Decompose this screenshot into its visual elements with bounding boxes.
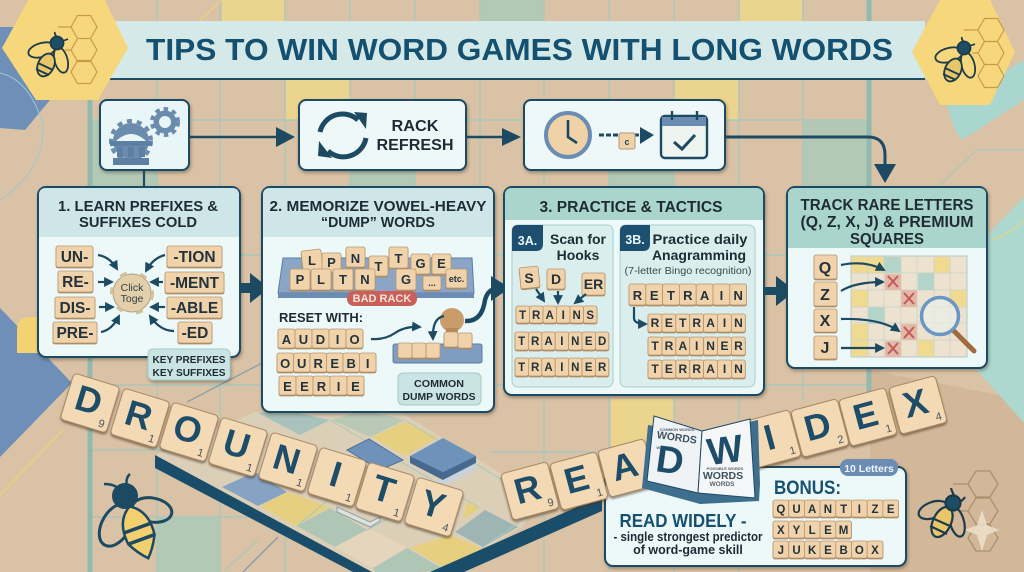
word tiles: audio, ourebi, eerie xyxy=(277,329,376,395)
hook tiles and arrows xyxy=(519,266,605,295)
word tiles: retrain, trainer, terrain: T xyxy=(651,339,659,353)
word tiles: READWIDEX: A xyxy=(607,443,642,489)
bonus word tiles xyxy=(773,500,899,558)
word tiles: audio, ourebi, eerie: O xyxy=(349,332,360,347)
icon: open book with words: WORDS xyxy=(703,470,743,482)
panel 4: track rare letters: (Q, Z, X, J) & PREMIUM xyxy=(800,214,974,231)
word tiles: trains, trained, trainer: E xyxy=(585,336,593,348)
word tiles: retrain xyxy=(629,284,747,305)
suffix tiles xyxy=(165,246,224,343)
word tiles: DROUNITY: N xyxy=(268,436,305,482)
word tiles: DROUNITY: 1 xyxy=(245,462,254,475)
panel 3: practice and tactics: 3. PRACTICE & TACTICS xyxy=(540,199,722,216)
bonus word tiles: E xyxy=(824,545,832,557)
word tiles: trains, trained, trainer: R xyxy=(531,362,540,374)
arrow to small rack xyxy=(371,327,420,339)
bonus word tiles: U xyxy=(792,545,801,557)
icon: open book with words: W xyxy=(704,428,746,474)
rare letter tiles: X xyxy=(820,313,831,330)
badge: 10 letters: 10 Letters xyxy=(844,463,894,475)
word tiles: READWIDEX: X xyxy=(899,380,932,426)
icon: open book with words: POSSIBLE WORDS xyxy=(707,466,744,471)
sub-panel 3B: practice daily anagramming: Anagramming xyxy=(652,247,746,263)
panel 4: track rare letters: TRACK RARE LETTERS xyxy=(800,197,974,214)
word tiles: retrain, trainer, terrain: A xyxy=(706,316,715,330)
read widely text: of word-game skill xyxy=(633,543,743,557)
word tiles: DROUNITY: U xyxy=(218,421,255,467)
word tiles: retrain, trainer, terrain: E xyxy=(720,339,729,353)
bonus word tiles: N xyxy=(824,504,832,516)
word tiles: audio, ourebi, eerie: E xyxy=(283,379,292,394)
bad rack with tiles: N xyxy=(351,251,360,266)
sub-panel 3A: scan for hooks: Hooks xyxy=(557,247,600,263)
bad rack label xyxy=(347,291,417,306)
prefix tiles: DIS- xyxy=(60,300,90,317)
word tiles: DROUNITY: 1 xyxy=(295,477,304,490)
icon: open book with words: WORDS xyxy=(710,481,735,488)
word tiles: audio, ourebi, eerie: E xyxy=(300,379,309,394)
word tiles: READWIDEX: 4 xyxy=(934,410,943,424)
bonus word tiles: M xyxy=(839,525,848,537)
word tiles: retrain, trainer, terrain: R xyxy=(692,316,701,330)
sub-panel 3B: practice daily anagramming: Practice daily xyxy=(652,231,748,247)
word tiles: READWIDEX: 2 xyxy=(836,433,845,447)
prefix tiles: UN- xyxy=(61,249,88,266)
word tiles: DROUNITY: T xyxy=(367,466,400,512)
word tiles: retrain: N xyxy=(734,288,743,303)
click-together gear piece: Toge xyxy=(121,293,144,305)
word tiles: DROUNITY: Y xyxy=(415,481,450,527)
word tiles: trains, trained, trainer: E xyxy=(585,362,593,374)
suffix tiles: -MENT xyxy=(170,275,220,292)
word tiles: DROUNITY: 4 xyxy=(441,522,450,535)
word tiles: retrain, trainer, terrain: N xyxy=(734,316,743,330)
rare letter tiles xyxy=(814,255,837,359)
bonus word tiles: L xyxy=(809,525,816,537)
word tiles: retrain: I xyxy=(720,288,723,303)
bad rack with tiles: L xyxy=(317,272,325,287)
bonus word tiles: K xyxy=(808,545,817,557)
mini premium-square board xyxy=(851,256,967,357)
word tiles: READWIDEX: 1 xyxy=(595,486,604,500)
bonus word tiles: O xyxy=(855,545,864,557)
word tiles: READWIDEX: E xyxy=(560,456,593,502)
word tiles: DROUNITY: 1 xyxy=(147,433,156,446)
bad rack with tiles: L xyxy=(308,253,316,268)
word tiles: DROUNITY: R xyxy=(120,392,157,438)
arrows from letters to squares xyxy=(841,263,899,348)
word tiles: READWIDEX: R xyxy=(510,466,545,512)
suffix tiles: -ABLE xyxy=(171,300,218,317)
panel 1: prefixes and suffixes: 1. LEARN PREFIXES & xyxy=(58,198,218,215)
bad rack with tiles: etc. xyxy=(449,274,464,284)
word tiles: trains, trained, trainer: I xyxy=(560,336,564,348)
panel 1: prefixes and suffixes: SUFFIXES COLD xyxy=(79,214,197,231)
word tiles: audio, ourebi, eerie: D xyxy=(316,332,325,347)
rare letter tiles: Z xyxy=(820,287,830,304)
bonus word tiles: Q xyxy=(776,504,785,516)
badge: 10 letters xyxy=(840,459,898,476)
panel 2: dump words: “DUMP” WORDS xyxy=(321,214,435,231)
bonus word tiles: X xyxy=(871,545,879,557)
word tiles: trains, trained, trainer: T xyxy=(518,336,525,348)
word tiles: READWIDEX: 9 xyxy=(546,496,555,510)
word tiles: DROUNITY: 1 xyxy=(392,507,401,520)
rare letter tiles: Q xyxy=(819,260,831,277)
word tiles: DROUNITY xyxy=(60,373,464,537)
word tiles: audio, ourebi, eerie: E xyxy=(330,356,339,371)
sub-panel 3A: scan for hooks xyxy=(512,225,613,387)
word tiles: retrain, trainer, terrain: E xyxy=(665,316,673,330)
word tiles: audio, ourebi, eerie: I xyxy=(337,379,340,394)
word tiles: retrain, trainer, terrain: I xyxy=(723,316,726,330)
game board in perspective xyxy=(155,410,602,572)
word tiles: retrain, trainer, terrain: R xyxy=(692,362,701,376)
word tiles: retrain, trainer, terrain xyxy=(648,314,745,378)
word tiles: trains, trained, trainer: I xyxy=(562,310,565,322)
bonus word tiles: B xyxy=(839,545,848,557)
icon: dashed arrow with tile: c xyxy=(624,137,630,147)
sub-panel 3A: scan for hooks: 3A. xyxy=(518,234,537,248)
arrows into click-together piece xyxy=(98,255,174,332)
panel 3: practice and tactics xyxy=(504,187,764,395)
word tiles: DROUNITY: 1 xyxy=(344,492,353,505)
word tiles: trains, trained, trainer: N xyxy=(573,310,581,322)
word tiles: retrain, trainer, terrain: R xyxy=(678,362,687,376)
word tiles: trains, trained, trainer xyxy=(515,306,609,376)
word tiles: DROUNITY: 1 xyxy=(196,447,205,460)
prefix tiles xyxy=(53,246,97,343)
word tiles: trains, trained, trainer: D xyxy=(598,336,606,348)
bad rack with tiles: G xyxy=(401,272,411,287)
icon: open book with words: WORDS xyxy=(656,429,698,447)
word tiles: audio, ourebi, eerie: A xyxy=(282,332,292,347)
panel 4: track rare letters xyxy=(787,187,987,368)
icon: open book with words: D xyxy=(653,438,686,484)
hook tiles and arrows: S xyxy=(524,270,534,286)
word tiles: audio, ourebi, eerie: U xyxy=(299,332,308,347)
arrow: panel 3 to panel 4 xyxy=(764,276,795,306)
arrow: panel 1 to panel 2 xyxy=(240,273,269,303)
icon: clock xyxy=(546,113,590,157)
legend: key prefixes and suffixes: KEY PREFIXES xyxy=(152,354,226,366)
bonus word tiles: X xyxy=(777,525,785,537)
title banner: TIPS TO WIN WORD GAMES WITH LONG WORDS xyxy=(146,32,893,67)
small rack with hand xyxy=(393,308,482,363)
bonus word tiles: A xyxy=(808,504,816,516)
icon: left honeycomb badge with bee xyxy=(2,0,128,100)
word tiles: retrain: R xyxy=(633,288,643,303)
word tiles: retrain, trainer, terrain: A xyxy=(678,339,687,353)
bonus word tiles: Y xyxy=(793,525,801,537)
step box: learn icon xyxy=(100,100,189,170)
word tiles: audio, ourebi, eerie: B xyxy=(347,356,356,371)
read widely text: - single strongest predictor xyxy=(614,530,763,544)
bad rack with tiles: P xyxy=(327,255,336,270)
click-together gear piece xyxy=(112,272,152,314)
word tiles: trains, trained, trainer: R xyxy=(532,310,541,322)
bonus word tiles: I xyxy=(858,504,861,516)
word tiles: retrain, trainer, terrain: T xyxy=(651,362,659,376)
word tiles: retrain, trainer, terrain: T xyxy=(679,316,687,330)
bad rack with tiles: G xyxy=(415,256,426,271)
word tiles: trains, trained, trainer: A xyxy=(544,336,553,348)
word tiles: trains, trained, trainer: N xyxy=(571,336,579,348)
common dump words label xyxy=(398,373,481,405)
word tiles: trains, trained, trainer: A xyxy=(546,310,554,322)
prefix tiles: PRE- xyxy=(56,325,94,342)
word tiles: DROUNITY: 9 xyxy=(97,418,106,431)
sub-panel 3B: practice daily anagramming: (7-letter Bingo recognition) xyxy=(624,265,752,277)
prefix tiles: RE- xyxy=(62,274,89,291)
sub-panel 3B: practice daily anagramming xyxy=(620,225,755,387)
panel 4: track rare letters: SQUARES xyxy=(850,231,924,248)
word tiles: retrain, trainer, terrain: N xyxy=(706,339,715,353)
icon: bee with honeycomb bottom right xyxy=(916,471,999,551)
step box: rack refresh: RACK xyxy=(392,118,439,135)
step box: rack refresh xyxy=(299,100,466,170)
icon: open book with words: WIDELY xyxy=(656,445,672,450)
word tiles: retrain, trainer, terrain: R xyxy=(665,339,674,353)
icon: magnifying glass xyxy=(922,298,974,351)
bad rack with tiles: T xyxy=(395,251,403,266)
word tiles: READWIDEX: 1 xyxy=(788,444,797,458)
icon: right honeycomb badge with bee xyxy=(912,0,1015,105)
legend: key prefixes and suffixes: KEY SUFFIXES xyxy=(152,367,226,379)
bonus word tiles: E xyxy=(887,504,895,516)
word tiles: audio, ourebi, eerie: E xyxy=(351,379,360,394)
word tiles: retrain: E xyxy=(650,288,659,303)
word tiles: READWIDEX xyxy=(501,376,947,520)
bonus word tiles: T xyxy=(840,504,847,516)
sub-panel 3B: practice daily anagramming: 3B. xyxy=(625,233,645,247)
bad rack with tiles: N xyxy=(360,272,370,287)
bad rack with tiles xyxy=(278,247,474,298)
word tiles: retrain, trainer, terrain: A xyxy=(706,362,715,376)
connector arrows between top step boxes xyxy=(144,127,896,187)
icon: open book with words xyxy=(642,416,760,504)
word tiles: audio, ourebi, eerie: O xyxy=(280,356,290,371)
panel: read widely and bonus xyxy=(605,459,906,566)
icon: gear and temple xyxy=(110,109,178,165)
common dump words label: DUMP WORDS xyxy=(402,391,476,403)
word tiles: audio, ourebi, eerie: U xyxy=(297,356,306,371)
bonus heading: BONUS: xyxy=(774,478,841,499)
word tiles: trains, trained, trainer: I xyxy=(560,362,564,374)
icon: dashed arrow with tile xyxy=(599,127,654,149)
word tiles: trains, trained, trainer: T xyxy=(519,310,526,322)
word tiles: audio, ourebi, eerie: I xyxy=(336,332,339,347)
word tiles: retrain, trainer, terrain: I xyxy=(723,362,726,376)
step box: daily schedule xyxy=(524,100,725,170)
word tiles: DROUNITY: O xyxy=(168,405,207,453)
icon: refresh arrows xyxy=(318,112,367,158)
sub-panel 3A: scan for hooks: Scan for xyxy=(550,231,607,247)
word tiles: retrain: A xyxy=(700,288,710,303)
word tiles: retrain, trainer, terrain: N xyxy=(734,362,743,376)
bad rack with tiles: E xyxy=(437,256,446,271)
word tiles: trains, trained, trainer: R xyxy=(531,336,540,348)
bad rack with tiles: ... xyxy=(428,278,436,288)
bad rack with tiles: P xyxy=(296,272,305,287)
word tiles: retrain, trainer, terrain: I xyxy=(695,339,698,353)
click-together gear piece: Click xyxy=(121,282,144,294)
rare letter tiles: J xyxy=(821,340,829,357)
bonus word tiles: E xyxy=(824,525,832,537)
word tiles: DROUNITY: D xyxy=(70,377,107,423)
icon: calendar with check xyxy=(661,111,707,158)
bad rack label: BAD RACK xyxy=(353,293,411,305)
icon: open book with words: COMMON WORDS xyxy=(659,427,695,432)
word tiles: retrain: T xyxy=(667,288,675,303)
word tiles: trains, trained, trainer: S xyxy=(586,310,594,322)
word tiles: retrain, trainer, terrain: R xyxy=(651,316,660,330)
word tiles: trains, trained, trainer: N xyxy=(571,362,579,374)
panel 2: dump words: 2. MEMORIZE VOWEL-HEAVY xyxy=(270,198,486,215)
word tiles: audio, ourebi, eerie: R xyxy=(314,356,324,371)
bad rack with tiles: T xyxy=(339,272,347,287)
word tiles: trains, trained, trainer: A xyxy=(544,362,553,374)
icon: large bee bottom left xyxy=(92,474,174,563)
bad rack with tiles: T xyxy=(375,259,383,274)
bonus word tiles: Z xyxy=(871,504,879,516)
bonus word tiles: U xyxy=(792,504,801,516)
step box: rack refresh: REFRESH xyxy=(376,137,454,154)
word tiles: READWIDEX: E xyxy=(849,392,882,438)
suffix tiles: -ED xyxy=(182,325,208,342)
word tiles: READWIDEX: 1 xyxy=(884,422,893,436)
legend: key prefixes and suffixes xyxy=(148,349,230,380)
word tiles: trains, trained, trainer: R xyxy=(598,362,607,374)
title banner xyxy=(110,21,925,79)
arrow: panel 2 to panel 3 xyxy=(465,276,510,321)
word tiles: trains, trained, trainer: T xyxy=(518,362,525,374)
bonus word tiles: J xyxy=(778,545,784,557)
suffix tiles: -TION xyxy=(173,249,216,266)
hook tiles and arrows: ER xyxy=(584,276,603,292)
hook tiles and arrows: D xyxy=(551,271,561,287)
reset with heading: RESET WITH: xyxy=(279,310,363,325)
word tiles: retrain: R xyxy=(683,288,693,303)
word tiles: retrain, trainer, terrain: R xyxy=(734,339,743,353)
word tiles: audio, ourebi, eerie: I xyxy=(366,356,370,371)
panel 1: prefixes and suffixes xyxy=(38,187,240,380)
common dump words label: COMMON xyxy=(414,378,464,390)
word tiles: READWIDEX: D xyxy=(800,403,835,449)
word tiles: retrain, trainer, terrain: E xyxy=(665,362,673,376)
word tiles: audio, ourebi, eerie: R xyxy=(317,379,327,394)
read widely text xyxy=(614,511,763,557)
word tiles: READWIDEX: I xyxy=(759,416,780,458)
panel 2: dump words xyxy=(262,187,494,412)
read widely text: READ WIDELY - xyxy=(620,511,746,531)
word tiles: DROUNITY: I xyxy=(325,453,347,495)
